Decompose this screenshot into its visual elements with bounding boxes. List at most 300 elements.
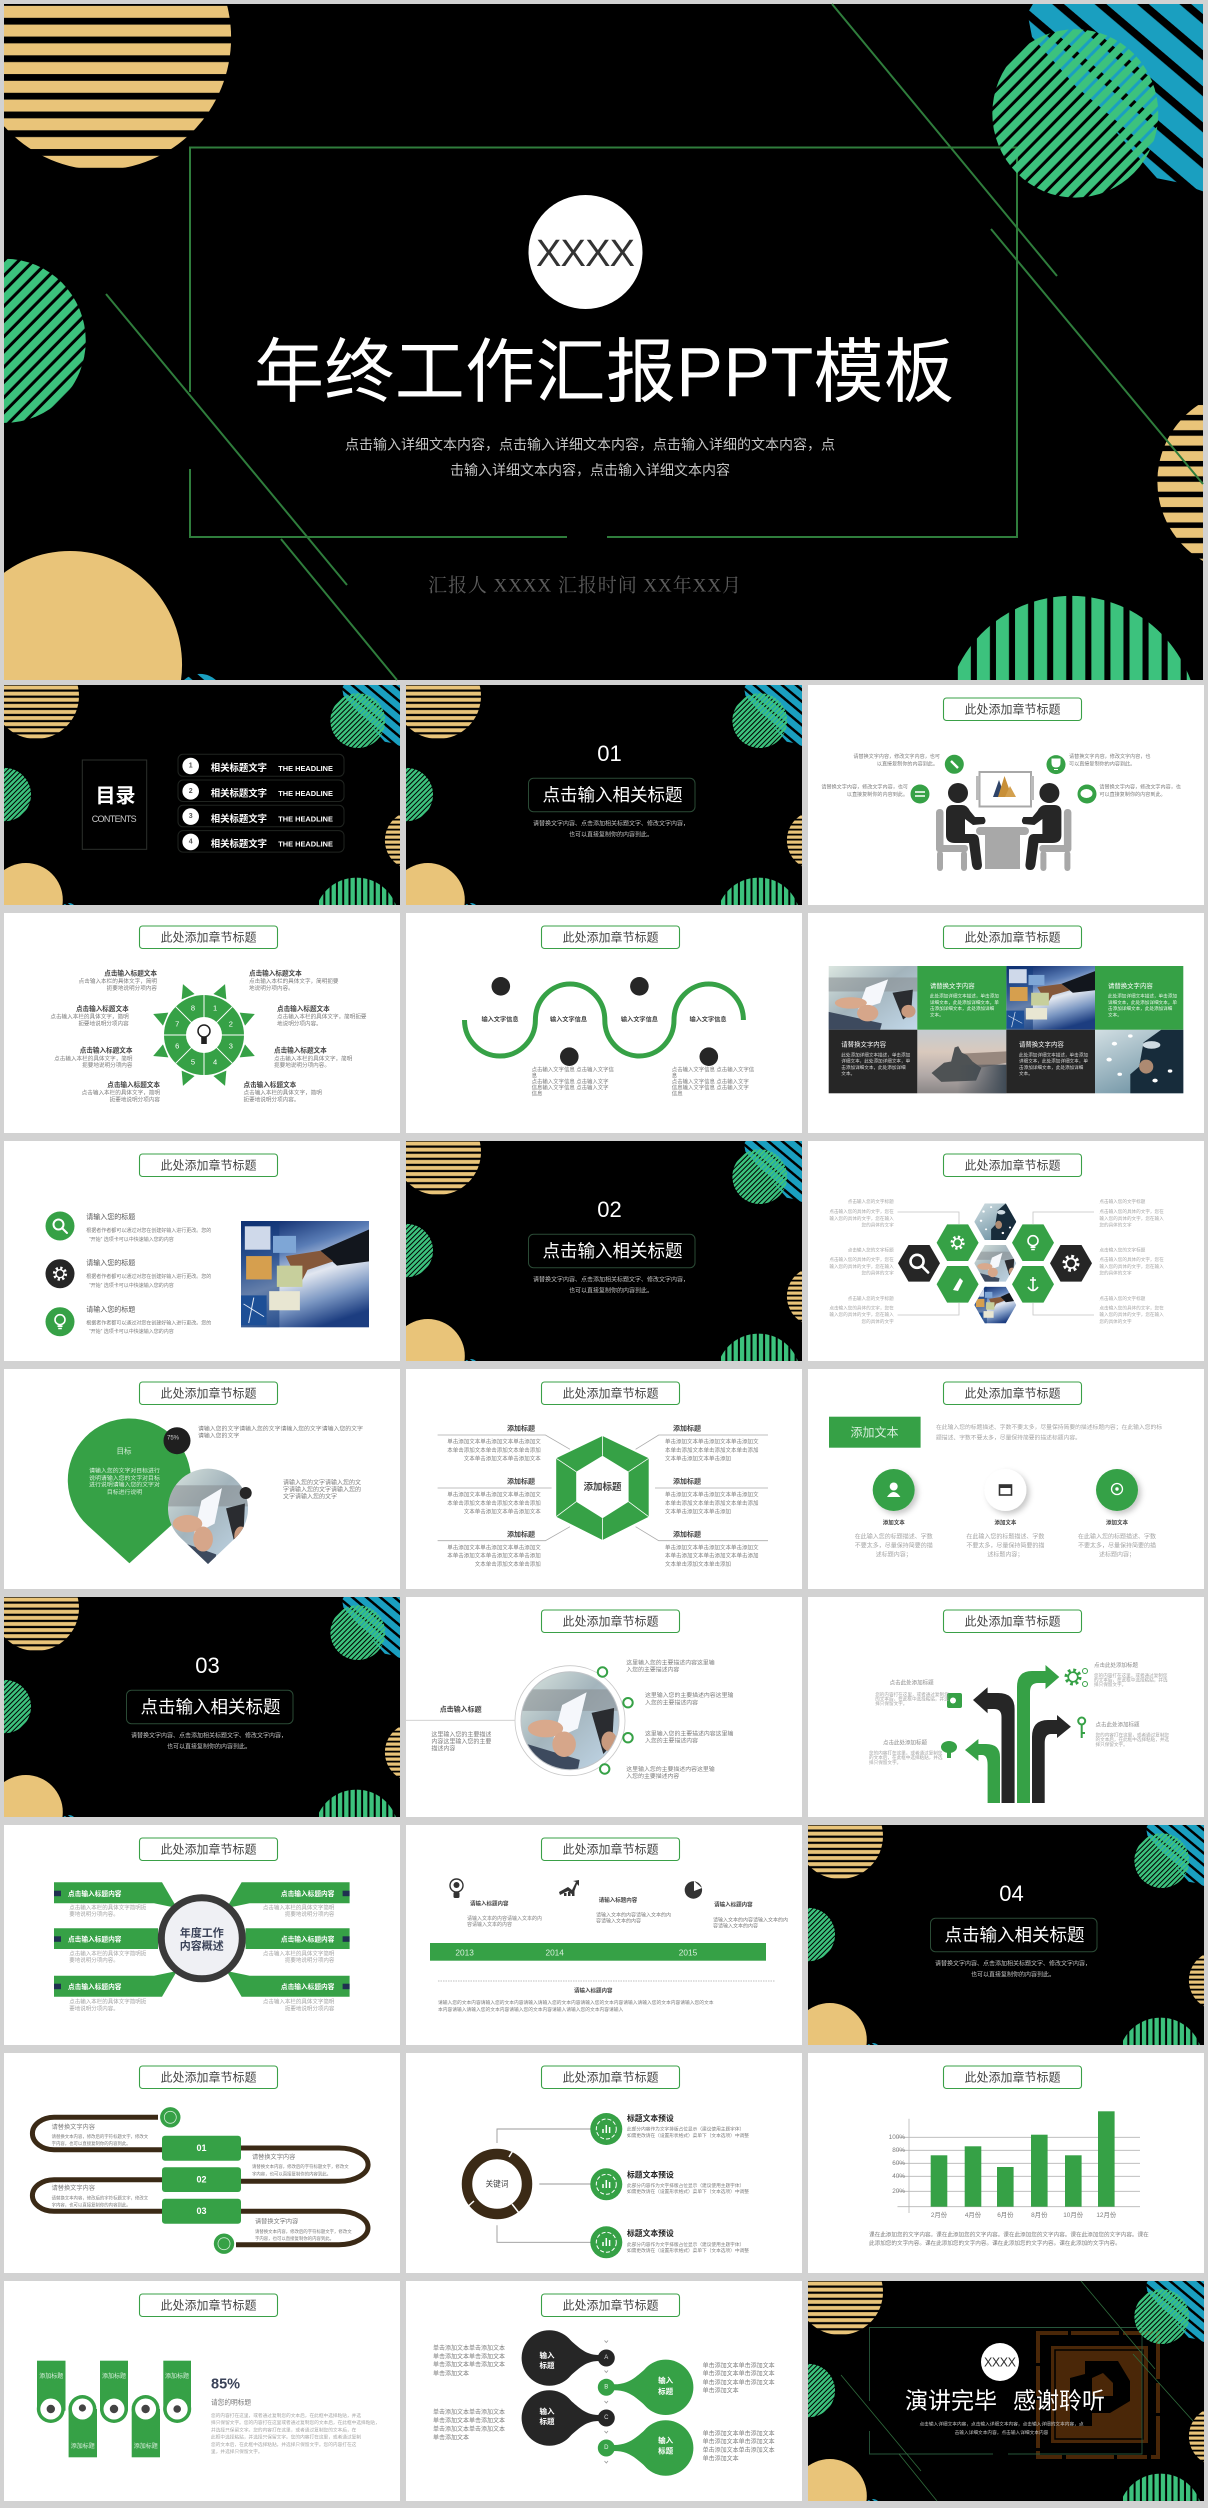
list item 2: 根据者作者都可以通过对您在创建好输入进行更改。您的	[86, 1273, 211, 1280]
right person and chair	[1022, 783, 1071, 871]
slide: section 01	[406, 685, 802, 905]
text 1: 如需更改请在（设置形状格式）菜单下（文本选项）中调整	[627, 2132, 749, 2139]
text: right 1: 这里输入您的主要描述内容这里输	[626, 1659, 715, 1667]
slide: flow blobs	[406, 2281, 802, 2501]
text: side	[283, 1478, 361, 1500]
text: left bottom	[447, 1530, 541, 1568]
text: right top	[665, 1424, 759, 1462]
text 3: 如需更改请在（设置形状格式）菜单下（文本选项）中调整	[627, 2247, 749, 2254]
text: left 2: 单击添加文本	[433, 2433, 469, 2441]
slide: timeline	[406, 1825, 802, 2045]
text: top left	[875, 1679, 949, 1707]
bottom text: 请输入您的文本内容请输入您的文本内容请输入请输入您的文本内容请输入您的文本内容请输入请输入您的文本内容请输入您的文本	[438, 1999, 714, 2006]
slide: contents	[4, 685, 400, 905]
block 2: 请输入标题内容	[599, 1896, 638, 1904]
contents item 4	[178, 831, 344, 852]
slide: section 03	[4, 1597, 400, 1817]
column 2 text: 不要太多，尽量保持简要的描	[966, 1541, 1044, 1549]
block 01	[162, 2136, 241, 2161]
wave labels: 输入文字信息	[550, 1016, 587, 1024]
text: left 1: 单击添加文本单击添加文本	[433, 2352, 505, 2360]
right labels: 点击输入标题内容	[281, 1889, 335, 1898]
text 2: 标题文本预设	[627, 2170, 674, 2180]
text: top right	[1094, 1661, 1168, 1688]
slide: arrows	[808, 1597, 1204, 1817]
heading: 此处添加章节标题	[964, 701, 1061, 716]
text: right 1: 点击输入标题文本	[249, 968, 302, 978]
text: right 1: 单击添加文本单击添加文本	[703, 2370, 775, 2378]
text: left middle	[447, 1476, 541, 1516]
text 1: 标题文本预设	[627, 2113, 674, 2123]
left labels	[68, 1889, 122, 1991]
text: right column: 您的具体的文字	[1099, 1318, 1132, 1325]
text: right 2	[645, 1691, 733, 1706]
blob A	[522, 2330, 615, 2386]
heading: 此处添加章节标题	[160, 1385, 257, 1400]
slide: section 04	[808, 1825, 1204, 2045]
text: right top: 本单击添加文本单击添加文本单击添加	[665, 1446, 759, 1454]
hexagon ring	[556, 1436, 649, 1540]
icon: cloud	[941, 1741, 957, 1758]
contents item 2: THE HEADLINE	[278, 789, 333, 798]
contents item 1: THE HEADLINE	[278, 764, 333, 773]
heading	[944, 2066, 1082, 2088]
list item 2: “开始” 选项卡可以中快速输入您的内容	[89, 1282, 174, 1289]
text: left column: 您的具体的文字	[862, 1318, 894, 1325]
green card 2: 此处添加详细文本描述，单击添加	[1108, 992, 1177, 1000]
text: right 4: 点击输入本栏的具体文字，简明	[244, 1088, 322, 1096]
text: left middle: 添加标题	[507, 1476, 535, 1486]
column 1 text: 添加文本	[883, 1518, 905, 1526]
text: side: 字请输入您的文字请输入您的	[283, 1485, 361, 1493]
wheel diagram: 4	[213, 1057, 217, 1066]
contents item 1: 相关标题文字	[211, 762, 267, 773]
text: left column: 输入您的具体的文字，您在输入	[829, 1311, 894, 1318]
blob B: B	[604, 2384, 608, 2390]
text: right 3: 点击输入本栏的具体文字，简明	[274, 1054, 353, 1062]
heading	[944, 926, 1082, 948]
text 2: 请替换文字内容	[52, 2184, 95, 2192]
bar chart: 40%	[892, 2173, 905, 2180]
text: bottom right	[1099, 783, 1181, 798]
intro text	[936, 1423, 1162, 1441]
text: left 3: 点击输入标题文本	[80, 1046, 133, 1054]
section decorative shapes	[406, 685, 802, 905]
text: left middle: 单击添加文本单击添加文本单击添加文	[447, 1491, 541, 1499]
connector lines	[898, 1212, 1094, 1315]
text: left column: 输入您的具体的文字，您在输入	[829, 1263, 894, 1270]
text: right top: 文本单击添加文本单击添加	[665, 1454, 731, 1462]
icon: key	[1078, 1718, 1085, 1738]
text: right 4: 这里输入您的主要描述内容这里输	[626, 1765, 715, 1773]
text: right 1: 单击添加文本单击添加文本	[703, 2378, 775, 2386]
dark card 1	[829, 1030, 917, 1093]
text: left 2	[50, 1004, 129, 1027]
left body text: 点击输入本栏的具体文字简明扼	[69, 1904, 147, 1912]
marker end	[214, 2234, 234, 2254]
column 1 text: 不要太多，尽量保持简要的描	[855, 1541, 933, 1549]
presentation screen	[976, 772, 1034, 806]
list item 1: “开始” 选项卡可以中快速输入您的内容	[89, 1236, 174, 1243]
block 01: 01	[196, 2143, 207, 2153]
column 2 text: 添加文本	[994, 1518, 1017, 1526]
heading	[542, 926, 680, 948]
slide: winding path	[4, 2053, 400, 2273]
pillar labels: 添加标题	[134, 2442, 158, 2450]
text: side: 请输入您的文字请输入您的文	[283, 1478, 361, 1486]
section decorative shapes	[4, 1597, 400, 1817]
bar chart: 8月份	[1031, 2210, 1048, 2219]
block 02	[162, 2167, 241, 2192]
dashed divider	[438, 1980, 775, 1982]
text 2: 字内容，也可以直接复制你的内容到此。	[52, 2202, 131, 2208]
chart caption: 此添加您的文字内容。课在此添加您的文字内容。课在此添加您的文字内容。课在此添加的文字内容。	[869, 2239, 1121, 2247]
closing title	[905, 2388, 1105, 2414]
text: right 1: 单击添加文本	[703, 2387, 739, 2395]
text: right column	[1099, 1198, 1164, 1325]
section note: 也可以直接复制你的内容到此。	[971, 1970, 1055, 1978]
text 1: 请替换文字内容	[52, 2123, 95, 2131]
closing subtitle: 击输入详细文本内容，点击输入详细文本内容	[955, 2429, 1049, 2436]
bar chart: 4月份	[965, 2210, 982, 2219]
text: left column: 点击输入您的具体的文字，您在	[829, 1304, 894, 1312]
slide: honeycomb	[808, 1141, 1204, 1361]
heading	[140, 1838, 278, 1860]
text: left top: 本单击添加文本单击添加文本单击添加	[447, 1446, 541, 1454]
icon: growth chart	[559, 1880, 579, 1896]
green card 2: 击添加详细文本，此处添加详细	[1108, 1005, 1173, 1012]
keyword ring	[465, 2149, 527, 2214]
text: left	[431, 1704, 491, 1753]
text: right column: 点击输入您的具体的文字，您在	[1099, 1304, 1164, 1312]
closing subtitle: 点击输入详细文本内容，点击输入详细文本内容，点击输入详细的文本内容，点	[919, 2420, 1084, 2428]
pillar labels: 添加标题	[165, 2372, 189, 2380]
text: left top: 文本单击添加文本单击添加文本	[464, 1454, 541, 1462]
heading	[140, 2294, 278, 2316]
text: right 1: 入您的主要描述内容	[626, 1666, 679, 1674]
bottom text: 本内容请输入请输入您的文本内容请输入您的文本内容请输入请输入您的文本内容请输入	[438, 2006, 624, 2013]
percent text	[211, 2398, 380, 2455]
wave text right: 点击输入文字信息 点击输入文字信	[672, 1066, 755, 1074]
text: right 1	[249, 968, 339, 992]
pillar icons	[37, 2395, 191, 2423]
right body text: 点击输入本栏的具体文字简明	[263, 1998, 335, 2006]
circle: user	[873, 1469, 915, 1511]
wave text left: 点击输入文字信息 点击输入文字	[532, 1078, 609, 1086]
node 1	[590, 2113, 622, 2145]
text: right top: 添加标题	[673, 1424, 701, 1432]
wave dots	[492, 977, 718, 1066]
column 1 text: 述标题内容；	[876, 1550, 912, 1558]
heading	[542, 1838, 680, 1860]
contents item 3: THE HEADLINE	[278, 814, 333, 823]
text: left top	[447, 1424, 541, 1462]
text 4: 请替换文本内容，修改后的字符标题文字，修改文	[255, 2228, 352, 2235]
wheel diagram	[151, 982, 257, 1088]
circular photo	[521, 1672, 619, 1770]
wave text left: 息	[532, 1072, 538, 1080]
text 1	[52, 2123, 149, 2147]
wheel diagram: 2	[229, 1019, 233, 1028]
heading: 此处添加章节标题	[160, 2297, 257, 2312]
text: bottom right	[1096, 1721, 1169, 1748]
text: top right: 择只保留文字。	[1094, 1681, 1126, 1688]
heading: 此处添加章节标题	[964, 929, 1061, 944]
text: left bottom: 添加标题	[507, 1530, 535, 1538]
closing badge	[981, 2343, 1019, 2381]
heading	[542, 1610, 680, 1632]
green teardrop	[68, 1418, 191, 1563]
contents item 1	[178, 754, 344, 776]
text 4: 字内容，也可以直接复制你的内容到此。	[255, 2235, 334, 2242]
marker start	[160, 2107, 180, 2128]
heading: 此处添加章节标题	[964, 1385, 1061, 1400]
wheel diagram: 1	[213, 1004, 217, 1013]
icon: gear	[46, 1259, 74, 1288]
text 2	[52, 2184, 149, 2208]
wave text right	[672, 1066, 755, 1097]
left body text	[69, 1904, 147, 2012]
text: left column: 点击输入您的具体的文字，您在	[829, 1256, 894, 1263]
text: left 2: 单击添加文本单击添加文本	[433, 2416, 505, 2424]
text: right 2: 单击添加文本单击添加文本	[703, 2446, 775, 2454]
chart caption: 课在此添加您的文字内容。课在此添加您的文字内容。课在此添加您的文字内容。课在此添加您的文字内容。课在	[869, 2231, 1149, 2239]
heading	[542, 2294, 680, 2316]
text: bottom right: 择只保留文字。	[1096, 1741, 1128, 1748]
text 4: 请替换文字内容	[255, 2218, 298, 2226]
section decorative shapes	[808, 1825, 1204, 2045]
column 1 text	[855, 1518, 933, 1558]
green card 1: 文本。	[930, 1012, 944, 1018]
list item 1: 根据者作者都可以通过对您在创建好输入进行更改。您的	[86, 1227, 211, 1234]
teardrop text: 进行说明请输入您的文字对	[89, 1481, 160, 1489]
text: bottom right: 可以直接复制你的内容到此。	[1099, 791, 1166, 798]
right body text: 扼要地说明分项内容	[285, 2004, 335, 2012]
text: right 2: 点击输入标题文本	[277, 1004, 330, 1013]
text 3: 此部分内容作为文字排版占位显示（建议使用主题字体）	[627, 2241, 744, 2248]
text: left column: 您的具体的文字	[862, 1270, 894, 1276]
text: right 2	[703, 2429, 775, 2462]
text: left 4: 点击输入本栏的具体文字，简明	[82, 1088, 160, 1096]
text: left 1: 点击输入标题文本	[104, 968, 157, 978]
text: right 4: 入您的主要描述内容	[626, 1772, 679, 1780]
text: right column: 点击输入您的具体的文字，您在	[1099, 1208, 1164, 1215]
block 1: 容请输入文本的内容	[467, 1921, 512, 1928]
text 2: 请替换文本内容，修改后的字符标题文字，修改文	[52, 2194, 149, 2202]
text 1: 此部分内容作为文字排版占位显示（建议使用主题字体）	[627, 2126, 744, 2132]
slide: hexagon ring	[406, 1369, 802, 1589]
text: right 2: 点击输入本栏的具体文字，简明扼要	[277, 1012, 367, 1020]
wave labels: 输入文字信息	[621, 1016, 658, 1024]
percent text: 择只保留文字。您的内容打在这里或者通过复制您的文本后，在此框中选择粘贴，	[211, 2419, 380, 2426]
blob C: C	[604, 2415, 609, 2421]
column 3 text: 述标题内容；	[1099, 1550, 1135, 1558]
text: bottom left: 点击此处添加标题	[883, 1739, 927, 1747]
text: left: 点击输入标题	[440, 1704, 482, 1714]
heading: 此处添加章节标题	[562, 929, 659, 944]
wave labels: 输入文字信息	[481, 1016, 519, 1024]
left person and chair	[936, 783, 986, 871]
winding path	[32, 2117, 368, 2245]
dark card 2: 文本。	[1019, 1070, 1033, 1077]
text: bottom right: 请替换文字内容，修改文字内容，也	[1099, 783, 1181, 790]
icon: gears	[1066, 1668, 1088, 1686]
text: right 3: 扼要地说明分项内容。	[274, 1061, 330, 1069]
blob B: 标题	[658, 2386, 674, 2396]
cover green frame	[190, 148, 1017, 537]
blob A: A	[604, 2355, 608, 2361]
text: top: 请输入您的文字	[198, 1432, 239, 1440]
text: bottom right: 点击此处添加标题	[1096, 1721, 1140, 1729]
closing diagonal lines	[841, 2281, 1193, 2501]
blob C	[522, 2390, 615, 2446]
block 1: 请输入文本的内容请输入文本的内	[467, 1915, 542, 1922]
column 3 text: 添加文本	[1106, 1518, 1128, 1526]
bar chart: 100%	[889, 2134, 905, 2141]
text: left 2: 扼要地说明分项内容	[78, 1019, 129, 1027]
heading: 此处添加章节标题	[160, 929, 257, 944]
block 1	[467, 1899, 542, 1928]
heading	[944, 698, 1082, 720]
block 3: 容请输入文本的内容	[713, 1922, 758, 1929]
section note: 也可以直接复制你的内容到此。	[167, 1742, 251, 1750]
slide: annual overview	[4, 1825, 400, 2045]
text: left middle: 本单击添加文本单击添加文本单击添加	[447, 1499, 541, 1507]
closing subtitle	[919, 2420, 1084, 2436]
text: top left: 您的内容打在这里，或者通过复制您	[875, 1691, 949, 1698]
pillar labels: 添加标题	[39, 2372, 63, 2380]
list item 1: 请输入您的标题	[86, 1212, 135, 1221]
dark card 1: 文本。	[841, 1070, 855, 1077]
bottom text	[438, 1987, 714, 2013]
icon: bulb	[46, 1307, 74, 1336]
heading	[542, 2066, 680, 2088]
contents item 4: 相关标题文字	[211, 838, 267, 849]
section note: 也可以直接复制你的内容到此。	[569, 830, 653, 838]
slide: meeting	[808, 685, 1204, 905]
heading	[140, 1154, 278, 1176]
section title box: 点击输入相关标题	[542, 785, 682, 805]
block 3: 请输入文本的内容请输入文本的内	[713, 1916, 788, 1923]
column 1 text: 在此输入您的标题描述、字数	[855, 1532, 933, 1540]
right body text	[263, 1904, 335, 2012]
text 1: 字内容，也可以直接复制你的内容到此。	[52, 2140, 131, 2147]
dark card 1: 请替换文字内容	[841, 1040, 887, 1048]
text: left 3: 点击输入本栏的具体文字，简明	[54, 1054, 133, 1062]
right labels: 点击输入标题内容	[281, 1934, 335, 1944]
blob A: 输入	[540, 2350, 555, 2360]
dark card 2	[1006, 1030, 1095, 1093]
text: right column: 您的具体的文字	[1099, 1270, 1132, 1276]
text: right bottom: 文本单击添加文本单击添加	[665, 1560, 731, 1568]
blob C: 标题	[540, 2416, 555, 2426]
text: right bottom	[665, 1530, 759, 1568]
wave text left: 信息输入文字信息 点击输入文字	[532, 1083, 609, 1091]
slide: icon list	[4, 1141, 400, 1361]
chart caption	[869, 2231, 1149, 2247]
connector lines	[497, 2129, 592, 2242]
text: top right	[1069, 753, 1151, 767]
text: right 1: 单击添加文本单击添加文本	[703, 2361, 775, 2369]
heading	[944, 1382, 1082, 1404]
contents decorative shapes	[4, 685, 400, 905]
green label	[829, 1417, 921, 1448]
text: top left: 请替换文字内容，修改文字内容，也可	[853, 753, 940, 760]
text: left top: 单击添加文本单击添加文本单击添加文	[447, 1438, 541, 1446]
text: top right: 您的内容打在这里，或者通过复制您	[1094, 1672, 1168, 1679]
closing badge: XXXX	[984, 2356, 1017, 2370]
left labels: 点击输入标题内容	[68, 1982, 122, 1991]
column 3 text: 在此输入您的标题描述、字数	[1078, 1532, 1156, 1540]
section number: 04	[999, 1881, 1024, 1906]
column 2 text: 在此输入您的标题描述、字数	[966, 1532, 1044, 1540]
dark card 1: 此处添加详细文本描述，单击添加	[841, 1052, 911, 1058]
heading: 此处添加章节标题	[160, 1157, 257, 1172]
bottom text: 请输入标题内容	[574, 1987, 613, 1995]
green label: 添加文本	[850, 1424, 899, 1439]
dark card 1: 击添加详细文本，此处添加详细	[841, 1064, 906, 1071]
percent badge	[164, 1427, 190, 1454]
block 2: 容请输入文本的内容	[596, 1918, 641, 1925]
blob D: 标题	[658, 2446, 674, 2456]
section title box	[930, 1918, 1097, 1952]
column 3 text	[1078, 1518, 1156, 1558]
text: right 2: 单击添加文本单击添加文本	[703, 2438, 775, 2446]
cover badge	[528, 195, 642, 309]
text: right 1	[703, 2361, 775, 2395]
text: right 3: 点击输入标题文本	[274, 1046, 327, 1054]
text: top left	[853, 753, 940, 767]
meeting table	[976, 827, 1029, 869]
heading: 此处添加章节标题	[964, 1157, 1061, 1172]
text: right 2: 这里输入您的主要描述内容这里输	[645, 1691, 733, 1699]
green card 2: 请替换文字内容	[1108, 981, 1153, 990]
text: right bottom: 本单击添加文本单击添加文本单击添加	[665, 1552, 759, 1560]
text: top right: 请替换文字内容，修改文字内容，也	[1069, 753, 1151, 760]
right body text: 扼要地说明分项内容	[285, 1956, 335, 1964]
text: left column: 点击输入您的具体的文字，您在	[829, 1208, 894, 1215]
heading: 此处添加章节标题	[160, 1841, 257, 1856]
slide: circle photo	[406, 1597, 802, 1817]
percent text: 您的文本后，在此框中选择粘贴，并选择只保留文字。您的内容打在这	[211, 2441, 357, 2448]
green bars left	[54, 1882, 177, 1997]
pillar labels: 添加标题	[102, 2372, 126, 2380]
contents item 4: 4	[189, 838, 193, 845]
photo	[241, 1221, 369, 1327]
text 3	[252, 2153, 349, 2178]
icon: bulb	[450, 1879, 463, 1898]
text 1: 请替换文本内容，修改后的字符标题文字，修改文	[52, 2133, 149, 2140]
section title box	[528, 1234, 695, 1268]
text: left 2: 点击输入标题文本	[76, 1004, 129, 1013]
dark card 2: 此处添加详细文本描述，单击添加	[1019, 1052, 1088, 1058]
heading: 此处添加章节标题	[562, 2297, 659, 2312]
intro text: 在此输入您的标题描述、字数不要太多，尽量保持简要的描述标题内容；在此输入您的标	[936, 1423, 1162, 1431]
list item 3: 请输入您的标题	[86, 1304, 135, 1314]
section note: 请替换文字内容、点击添加相关标题文字、修改文字内容，	[533, 819, 689, 827]
text 3: 请替换文本内容，修改后的字符标题文字，修改文	[252, 2163, 349, 2170]
icon: trophy	[1046, 755, 1066, 774]
text: right middle: 本单击添加文本单击添加文本单击添加	[665, 1499, 759, 1507]
slide: closing	[808, 2280, 1204, 2502]
wave text left: 信息	[532, 1089, 543, 1097]
heading	[944, 1610, 1082, 1632]
text: right column: 点击输入您的具体的文字，您在	[1099, 1256, 1164, 1263]
section note: 请替换文字内容、点击添加相关标题文字、修改文字内容，	[935, 1959, 1091, 1967]
pillar labels	[39, 2372, 189, 2450]
text: left 2	[433, 2408, 505, 2441]
text: right top: 单击添加文本单击添加文本单击添加文	[665, 1438, 759, 1446]
